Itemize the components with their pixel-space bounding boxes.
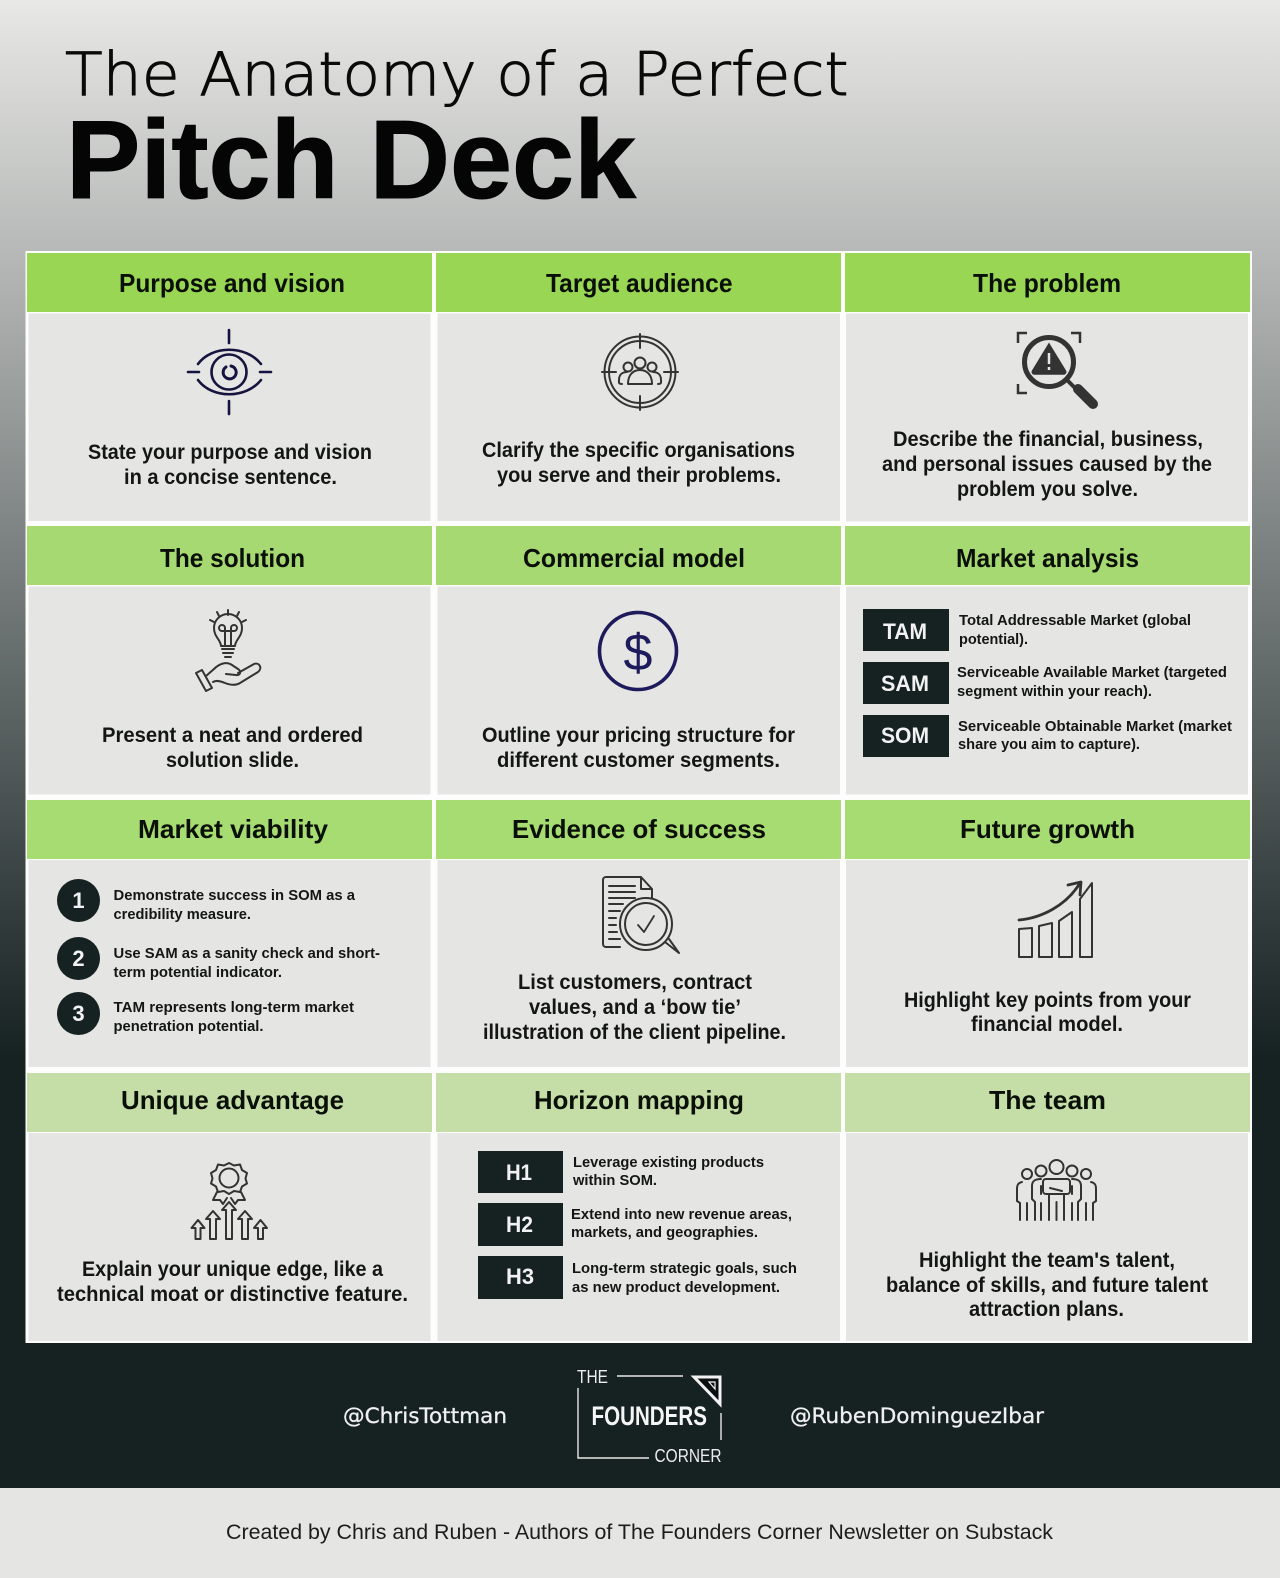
H1 row: H1 — [506, 1160, 532, 1185]
text block — [882, 428, 1212, 501]
list item 1: 1 — [72, 888, 85, 913]
text block — [482, 439, 795, 487]
H2 row: markets, and geographies. — [571, 1224, 758, 1241]
panel: horizon mapping — [436, 1073, 841, 1341]
heading: target audience: Target audience — [546, 268, 732, 298]
handle: Chris Tottman: @ChrisTottman — [343, 1404, 507, 1428]
panel: the problem — [845, 253, 1250, 522]
logo: The Founders Corner: FOUNDERS — [592, 1401, 707, 1431]
list item 2: Use SAM as a sanity check and short- — [114, 945, 380, 962]
panel: market analysis — [845, 526, 1250, 794]
text block — [88, 441, 372, 489]
list item 3 — [57, 992, 354, 1035]
panel: evidence of success — [436, 800, 841, 1067]
icon: dollar coin: $ — [624, 624, 653, 682]
text block: financial model. — [971, 1013, 1123, 1036]
SAM row: segment within your reach). — [957, 683, 1152, 700]
text block: and personal issues caused by the — [882, 453, 1212, 476]
icon: rising bars — [1019, 882, 1092, 957]
heading: the problem: The problem — [973, 268, 1121, 298]
icon: target with people — [602, 334, 678, 410]
list item 2: term potential indicator. — [114, 964, 282, 981]
text block: technical moat or distinctive feature. — [57, 1283, 408, 1306]
SAM row — [863, 662, 1227, 704]
heading: horizon mapping: Horizon mapping — [534, 1085, 744, 1115]
text block: you serve and their problems. — [497, 464, 781, 487]
SOM row: share you aim to capture). — [958, 736, 1140, 753]
text block — [483, 971, 786, 1044]
list item 3: 3 — [72, 1001, 85, 1026]
heading: market analysis: Market analysis — [956, 543, 1139, 573]
H1 row — [478, 1151, 764, 1193]
text block: State your purpose and vision — [88, 441, 372, 464]
panel: commercial model — [436, 526, 841, 794]
text block: Clarify the specific organisations — [482, 439, 795, 462]
SOM row: SOM — [881, 723, 929, 748]
icon: dollar coin — [600, 612, 676, 690]
heading: evidence of success: Evidence of success — [512, 814, 766, 844]
logo: The Founders Corner: THE — [577, 1367, 608, 1387]
H1 row: Leverage existing products — [573, 1154, 764, 1171]
list item 1: credibility measure. — [114, 906, 251, 923]
SOM row: Serviceable Obtainable Market (market — [958, 718, 1232, 735]
text block: values, and a ‘bow tie’ — [529, 996, 741, 1019]
list item 2 — [57, 937, 380, 981]
text block: Highlight key points from your — [904, 989, 1191, 1012]
footer credit: Created by Chris and Ruben - Authors of The Founders Corner Newsletter on Substack — [226, 1520, 1053, 1544]
H3 row — [478, 1256, 797, 1299]
icon: bulb over hand — [196, 610, 260, 691]
text block — [904, 989, 1191, 1036]
heading: unique advantage: Unique advantage — [121, 1085, 344, 1115]
title: Pitch Deck — [66, 98, 636, 222]
list item 1 — [57, 879, 356, 923]
SOM row — [863, 715, 1232, 757]
table backing — [26, 251, 1252, 1343]
text block: balance of skills, and future talent — [886, 1274, 1208, 1297]
text block: illustration of the client pipeline. — [483, 1021, 786, 1044]
title: The Anatomy of a Perfect — [65, 40, 848, 110]
text block: in a concise sentence. — [124, 466, 337, 489]
text block — [102, 724, 363, 772]
SAM row: SAM — [881, 671, 929, 696]
icon: eye — [188, 330, 271, 414]
text block: solution slide. — [166, 749, 299, 772]
TAM row: Total Addressable Market (global — [959, 612, 1191, 629]
panel: the solution — [27, 526, 432, 794]
H1 row: within SOM. — [572, 1172, 657, 1189]
panel: future growth — [845, 800, 1250, 1067]
text block: problem you solve. — [957, 478, 1138, 501]
heading: market viability: Market viability — [138, 814, 329, 844]
panel: target audience — [436, 253, 841, 521]
list item 2: 2 — [72, 946, 85, 971]
icon: magnifier with warning — [1018, 333, 1093, 404]
panel: purpose and vision — [27, 253, 432, 521]
text block: Describe the financial, business, — [893, 428, 1203, 451]
icon: award with arrows — [192, 1163, 267, 1239]
text block — [886, 1249, 1208, 1321]
text block — [482, 724, 795, 772]
SAM row: Serviceable Available Market (targeted — [957, 664, 1227, 681]
heading: future growth: Future growth — [960, 814, 1135, 844]
icon: team of people — [1017, 1160, 1096, 1220]
heading: the solution: The solution — [160, 543, 305, 573]
H2 row: H2 — [506, 1212, 533, 1237]
logo: The Founders Corner: CORNER — [654, 1446, 722, 1466]
text block: Present a neat and ordered — [102, 724, 363, 747]
text block: different customer segments. — [497, 749, 780, 772]
TAM row: potential). — [959, 631, 1028, 648]
footer band — [0, 1488, 1280, 1578]
H2 row — [478, 1203, 792, 1246]
TAM row — [863, 609, 1191, 651]
H3 row: Long-term strategic goals, such — [572, 1260, 797, 1277]
panel: market viability — [27, 800, 432, 1067]
H2 row: Extend into new revenue areas, — [571, 1206, 792, 1223]
H3 row: H3 — [506, 1264, 534, 1289]
handle: Ruben Dominguez Ibar: @RubenDominguezIbar — [790, 1404, 1044, 1428]
text block — [57, 1258, 408, 1306]
text block: Outline your pricing structure for — [482, 724, 795, 747]
text block: List customers, contract — [518, 971, 752, 994]
heading: purpose and vision: Purpose and vision — [119, 268, 345, 298]
list item 1: Demonstrate success in SOM as a — [114, 887, 356, 904]
panel: unique advantage — [27, 1073, 432, 1341]
H3 row: as new product development. — [572, 1279, 780, 1296]
logo: The Founders Corner — [577, 1367, 722, 1466]
list item 3: penetration potential. — [114, 1018, 264, 1035]
heading: commercial model: Commercial model — [523, 543, 745, 573]
text block: Explain your unique edge, like a — [82, 1258, 383, 1281]
title — [65, 40, 848, 222]
text block: Highlight the team's talent, — [919, 1249, 1175, 1272]
panel: the team — [845, 1073, 1250, 1341]
icon: document under magnifier — [603, 877, 679, 953]
text block: attraction plans. — [969, 1298, 1124, 1321]
heading: the team: The team — [989, 1085, 1106, 1115]
list item 3: TAM represents long-term market — [114, 999, 354, 1016]
TAM row: TAM — [883, 619, 927, 644]
